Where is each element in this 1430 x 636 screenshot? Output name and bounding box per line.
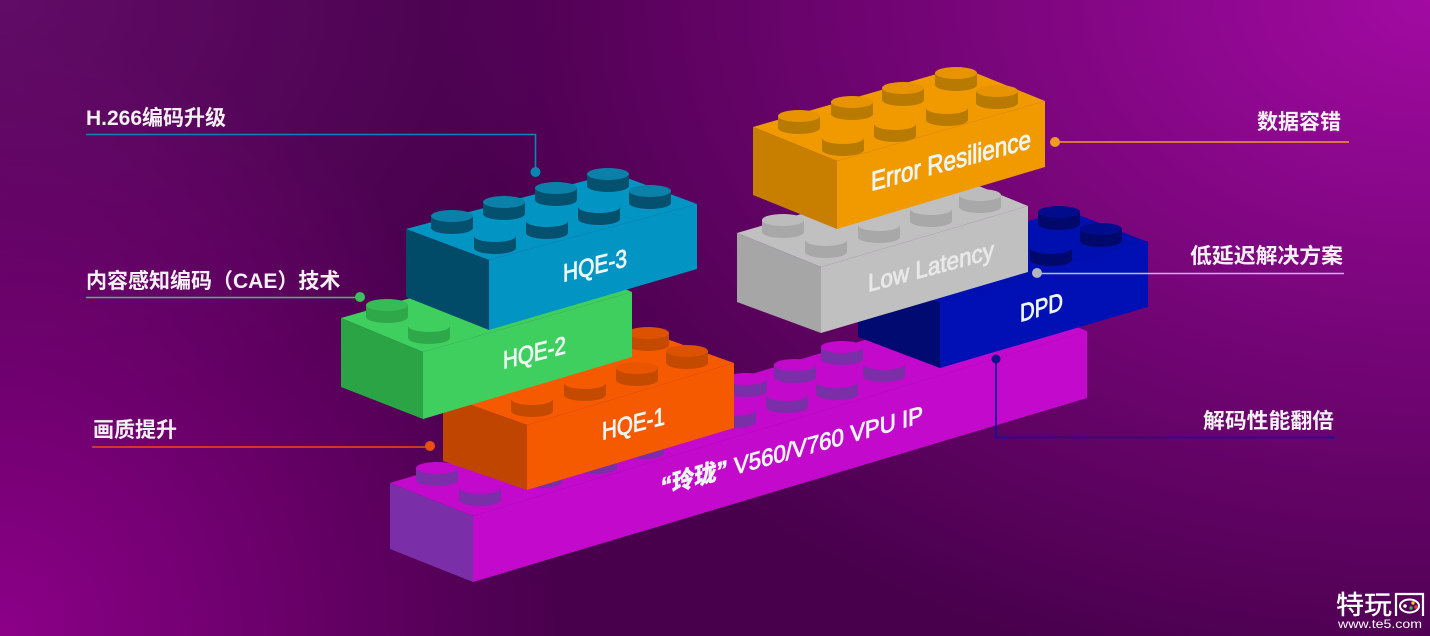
callout: 低延迟解决方案	[1032, 244, 1344, 278]
callout: 画质提升	[92, 419, 435, 451]
brick: HQE-2	[341, 258, 632, 419]
brick: DPD	[858, 206, 1148, 368]
callout: H.266编码升级	[86, 106, 540, 177]
brick: HQE-1	[443, 327, 734, 490]
callout: 数据容错: 数据容错	[1257, 110, 1341, 134]
brick: Low Latency	[737, 172, 1028, 333]
brick label: DPD: DPD	[1020, 288, 1063, 328]
brick label: 玲珑 V560/V760 VPU IP: “玲珑” V560/V760 VPU IP	[661, 401, 923, 501]
watermark: 特玩网 www.te5.com	[1336, 590, 1423, 631]
callout: H.266编码升级: H.266编码升级	[86, 106, 226, 130]
watermark: 特玩网 www.te5.com: www.te5.com	[1337, 617, 1422, 631]
brick label: HQE-1: HQE-1	[602, 403, 665, 446]
callout: 解码性能翻倍: 解码性能翻倍	[1203, 409, 1334, 433]
brick label: Error Resilience: Error Resilience	[871, 124, 1031, 197]
brick label: HQE-2: HQE-2	[503, 332, 566, 375]
brick: HQE-3	[406, 168, 697, 330]
brick label: HQE-3: HQE-3	[563, 244, 627, 288]
icon: gamepad net	[1396, 594, 1423, 616]
callout: 内容感知编码（CAE）技术: 内容感知编码（CAE）技术	[86, 269, 340, 293]
brick label: Low Latency: Low Latency	[868, 237, 994, 298]
callout: 数据容错	[1050, 110, 1349, 147]
callout: 解码性能翻倍	[992, 354, 1335, 438]
brick: Error Resilience	[753, 67, 1045, 229]
callout: 内容感知编码（CAE）技术	[86, 269, 365, 302]
watermark: 特玩网 www.te5.com: 特玩	[1336, 590, 1392, 620]
brick: 玲珑 V560/V760 VPU IP base	[390, 298, 1087, 582]
callout: 低延迟解决方案: 低延迟解决方案	[1190, 244, 1343, 268]
callout: 画质提升: 画质提升	[93, 419, 177, 442]
